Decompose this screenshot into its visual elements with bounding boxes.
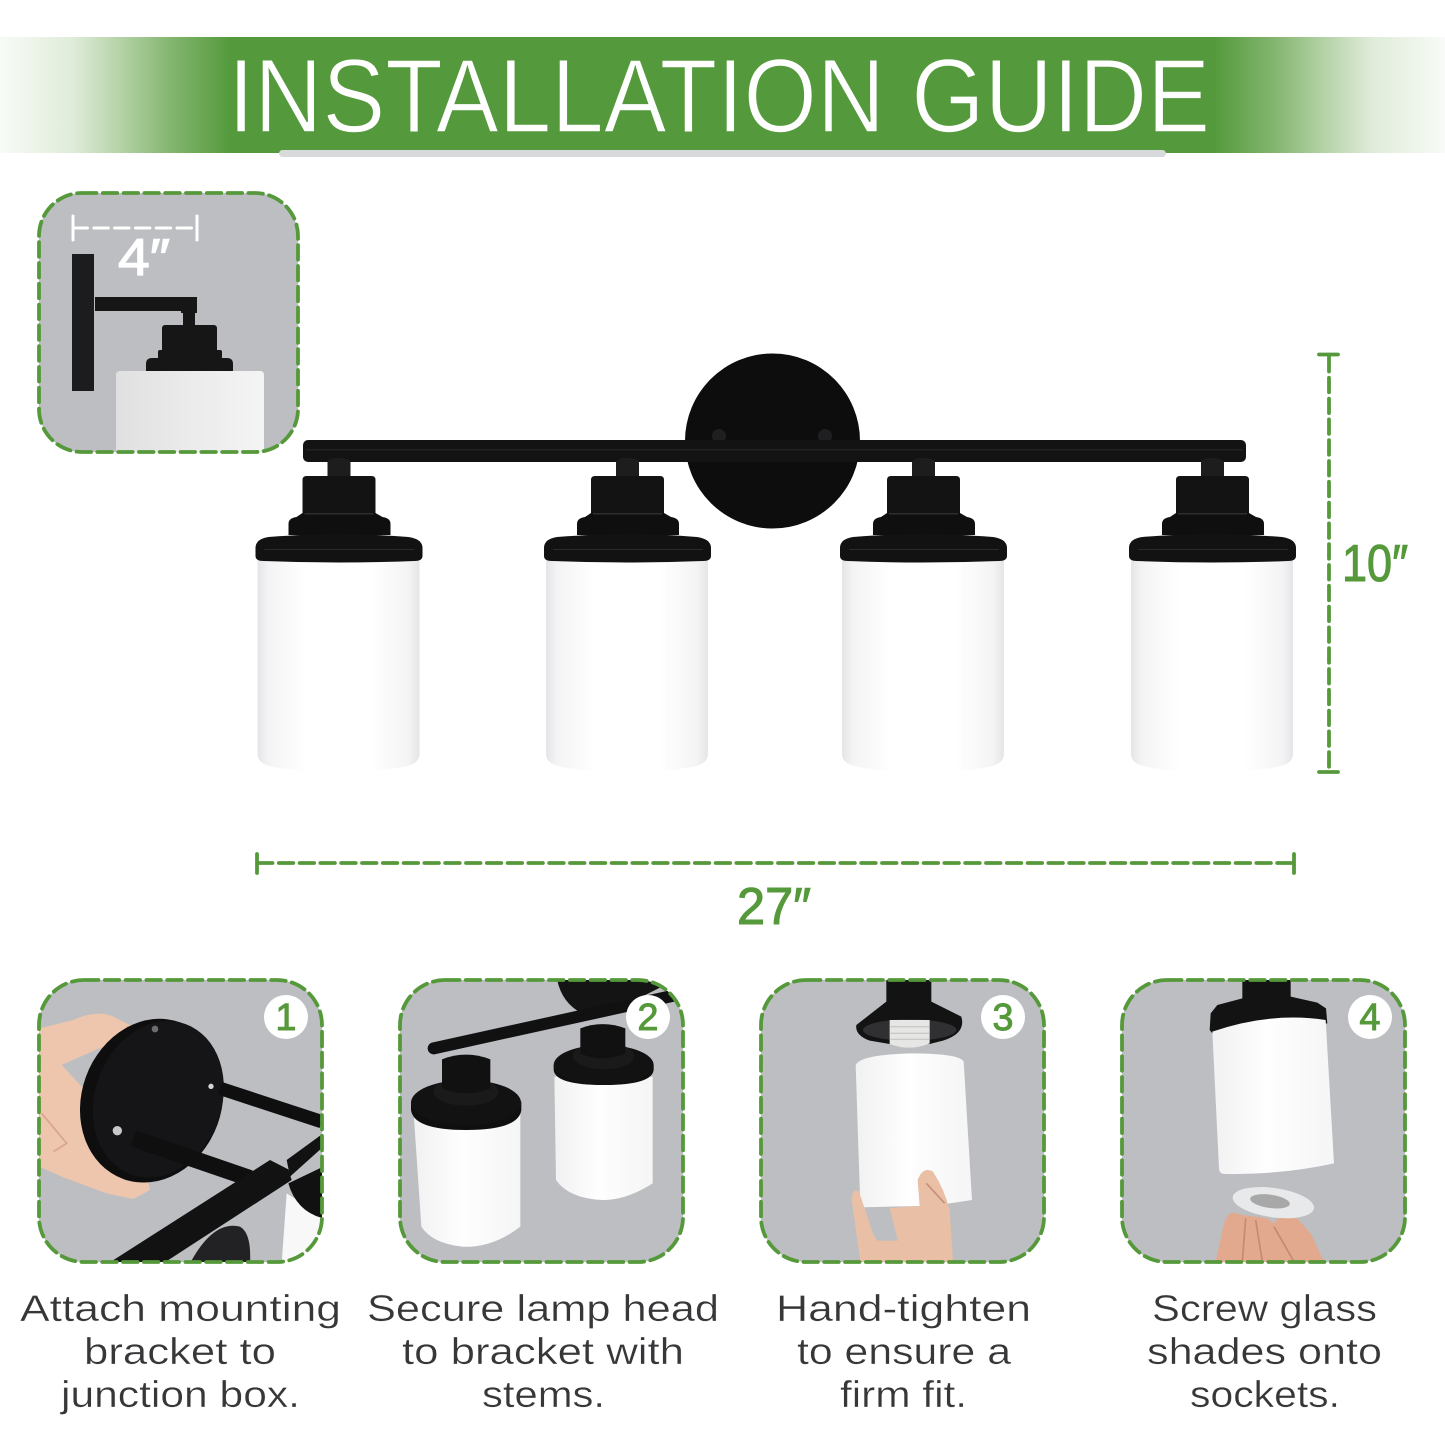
step 3 frame — [761, 980, 1044, 1262]
inset dimension label: 4″ — [118, 229, 170, 287]
shade fragment — [282, 1194, 320, 1261]
caption: step 1: Attach mounting — [20, 1288, 341, 1329]
lamp 3 — [840, 458, 1007, 773]
inset dimension line — [73, 216, 197, 240]
lower dark lamp shape — [190, 1226, 250, 1263]
mounting rods — [220, 1088, 322, 1122]
hand holding disc — [39, 1014, 150, 1199]
lamp 4 — [1129, 458, 1296, 773]
panel: step 2 — [400, 979, 683, 1262]
caption: step 2: to bracket with — [402, 1331, 684, 1372]
badge 4 — [1348, 995, 1392, 1039]
inset glass shade — [116, 371, 264, 452]
threaded socket — [890, 1020, 930, 1048]
fixture bar — [108, 1133, 323, 1263]
inset lamp arm and cap — [95, 297, 233, 371]
black socket neck and ring — [856, 978, 962, 1044]
badge 1: 1 — [275, 997, 297, 1039]
caption: step 4 — [1147, 1288, 1382, 1415]
mounting disc — [685, 354, 860, 528]
caption: step 4: shades onto — [1147, 1331, 1382, 1372]
panel: step 1 — [39, 980, 323, 1263]
step 2 frame — [400, 980, 683, 1262]
right lamp — [554, 1077, 653, 1200]
caption: step 2: Secure lamp head — [367, 1288, 719, 1329]
mounting plate — [80, 1018, 224, 1182]
step 4 frame — [1122, 980, 1405, 1262]
hand — [1216, 1213, 1324, 1262]
height dimension: 10 inches: 10″ — [1342, 535, 1408, 593]
caption: step 3: Hand-tighten — [776, 1288, 1031, 1329]
retaining ring — [1232, 1187, 1314, 1218]
left lamp — [414, 1113, 520, 1247]
badge 4: 4 — [1359, 997, 1381, 1039]
caption: step 4: sockets. — [1190, 1374, 1340, 1415]
badge 2 — [626, 995, 670, 1039]
glass shade — [1212, 1018, 1334, 1174]
lamp 2 — [544, 458, 711, 773]
panel: step 3 — [761, 978, 1044, 1262]
panel: 4 inch depth inset — [39, 193, 298, 452]
panel: step 4 — [1122, 978, 1405, 1262]
width dimension: 27 inches: 27″ — [737, 878, 811, 936]
bar — [434, 996, 672, 1048]
caption: step 3: firm fit. — [840, 1374, 967, 1415]
horizontal bar — [303, 440, 1246, 462]
badge 3 — [981, 995, 1025, 1039]
caption: step 3 — [776, 1288, 1031, 1415]
caption: step 4: Screw glass — [1152, 1288, 1377, 1329]
title: INSTALLATION GUIDE — [228, 38, 1210, 155]
caption: step 1: junction box. — [60, 1374, 300, 1415]
lamp 1 — [256, 458, 422, 773]
header banner — [0, 37, 1445, 157]
caption: step 2: stems. — [482, 1374, 605, 1415]
caption: step 3: to ensure a — [797, 1331, 1011, 1372]
hand — [852, 1170, 953, 1262]
caption: step 1: bracket to — [84, 1331, 276, 1372]
caption: step 1 — [20, 1288, 341, 1415]
caption: step 2 — [367, 1288, 719, 1415]
socket cap — [1210, 978, 1327, 1033]
glass shade — [856, 1053, 972, 1207]
badge 2: 2 — [637, 997, 659, 1039]
badge 3: 3 — [992, 997, 1014, 1039]
inset wall bracket — [72, 254, 94, 391]
step 1 frame — [39, 980, 322, 1262]
bracket disc — [558, 980, 660, 1011]
badge 1 — [264, 995, 308, 1039]
main fixture illustration — [256, 354, 1296, 773]
